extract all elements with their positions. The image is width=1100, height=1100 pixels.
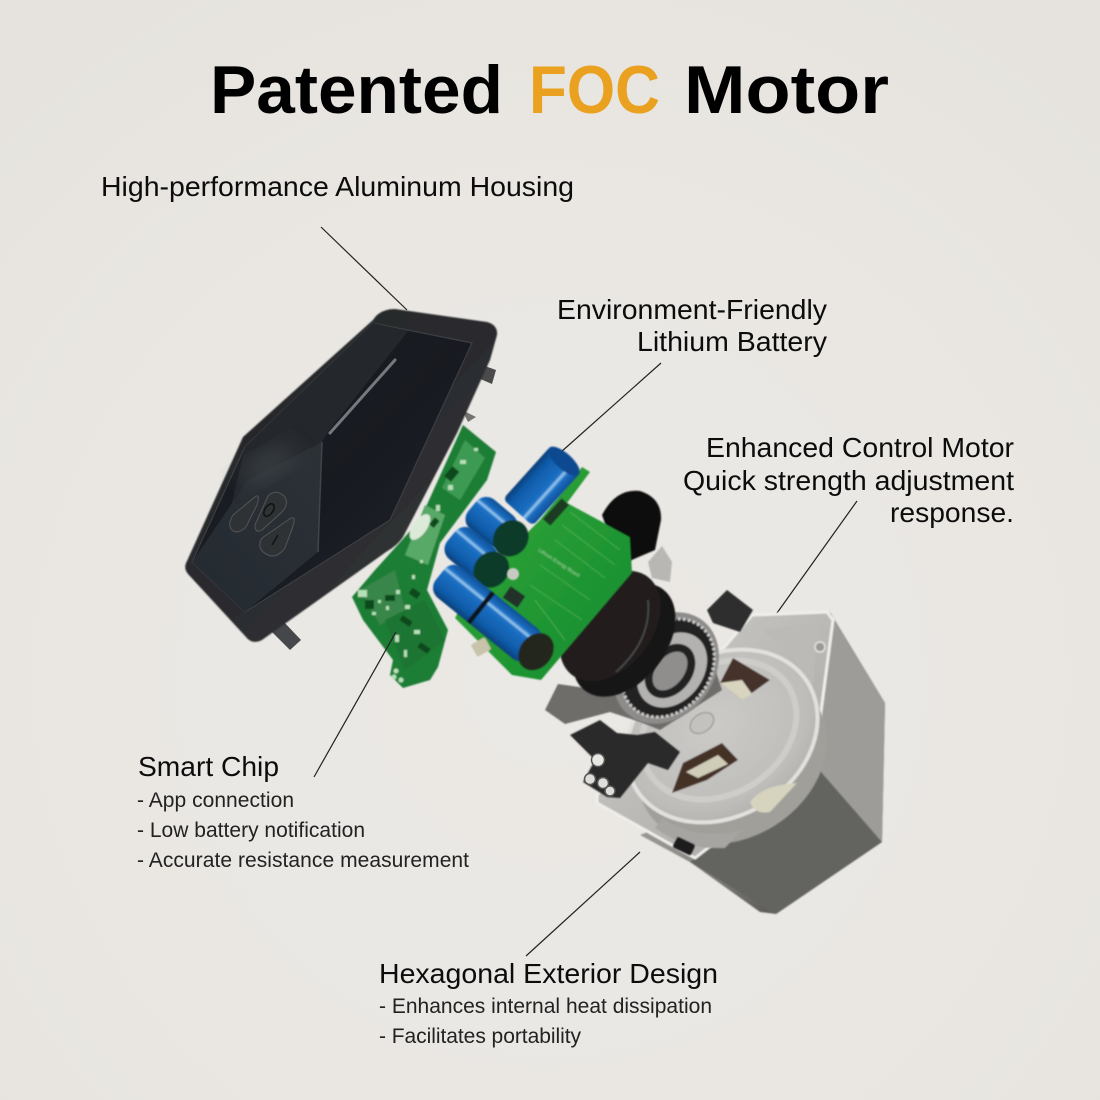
bracket [545, 660, 722, 730]
label: smart chip [137, 751, 469, 872]
title [210, 52, 889, 128]
sensor cube [707, 590, 753, 632]
label: hexagonal exterior design: - Facilitates portability [379, 1025, 582, 1048]
label: smart chip: - Low battery notification [137, 819, 365, 842]
leader line: hexagonal exterior [526, 852, 640, 956]
black rotor disc [539, 551, 696, 716]
capacitor: long lower [428, 559, 561, 677]
ridge highlight [330, 360, 395, 433]
label: smart chip: - App connection [137, 789, 294, 812]
coil window lower [672, 743, 738, 793]
title: Patented [210, 52, 503, 128]
label: hexagonal exterior design: Hexagonal Exterior Design [379, 958, 718, 989]
label: smart chip: Smart Chip [138, 751, 279, 782]
title: Motor [684, 52, 889, 128]
label: hexagonal exterior design [379, 958, 718, 1048]
capacitor: top [503, 442, 584, 526]
label: lithium battery: Environment-Friendly [557, 294, 827, 325]
leader line: smart chip [314, 632, 396, 777]
label: enhanced control motor: Enhanced Control Motor [706, 432, 1014, 463]
motor shell [597, 612, 885, 914]
label: enhanced control motor: response. [890, 497, 1014, 528]
leader line: aluminum housing [321, 227, 407, 310]
leader line: lithium battery [561, 363, 661, 452]
label: enhanced control motor: Quick strength adjustment [683, 465, 1014, 496]
facets [229, 323, 408, 515]
label: lithium battery: Lithium Battery [637, 326, 827, 357]
label: enhanced control motor [683, 432, 1014, 528]
label: aluminum housing: High-performance Aluminum Housing [101, 171, 574, 202]
button: left [230, 496, 258, 532]
black disc behind the board [602, 491, 661, 565]
gear ring [591, 591, 741, 745]
black plate with pads [570, 720, 680, 798]
board pin [507, 568, 519, 580]
capacitor: middle row [439, 522, 516, 595]
title: FOC [529, 52, 660, 128]
button: right [260, 518, 294, 556]
battery board [455, 467, 632, 680]
coil window upper [720, 658, 770, 700]
connector clip [648, 546, 672, 582]
aluminum housing cover [185, 309, 497, 650]
battery board: Lithium Energy Board [537, 548, 581, 579]
circuit board with chips [352, 425, 496, 688]
label: smart chip: - Accurate resistance measurement [137, 849, 469, 872]
exploded product [185, 309, 885, 914]
motor body [594, 615, 859, 879]
button: power [255, 492, 286, 531]
label: hexagonal exterior design: - Enhances internal heat dissipation [379, 995, 712, 1018]
label: lithium battery [557, 294, 827, 357]
capacitor: upper row [460, 492, 536, 564]
leader line: control motor [772, 501, 857, 620]
